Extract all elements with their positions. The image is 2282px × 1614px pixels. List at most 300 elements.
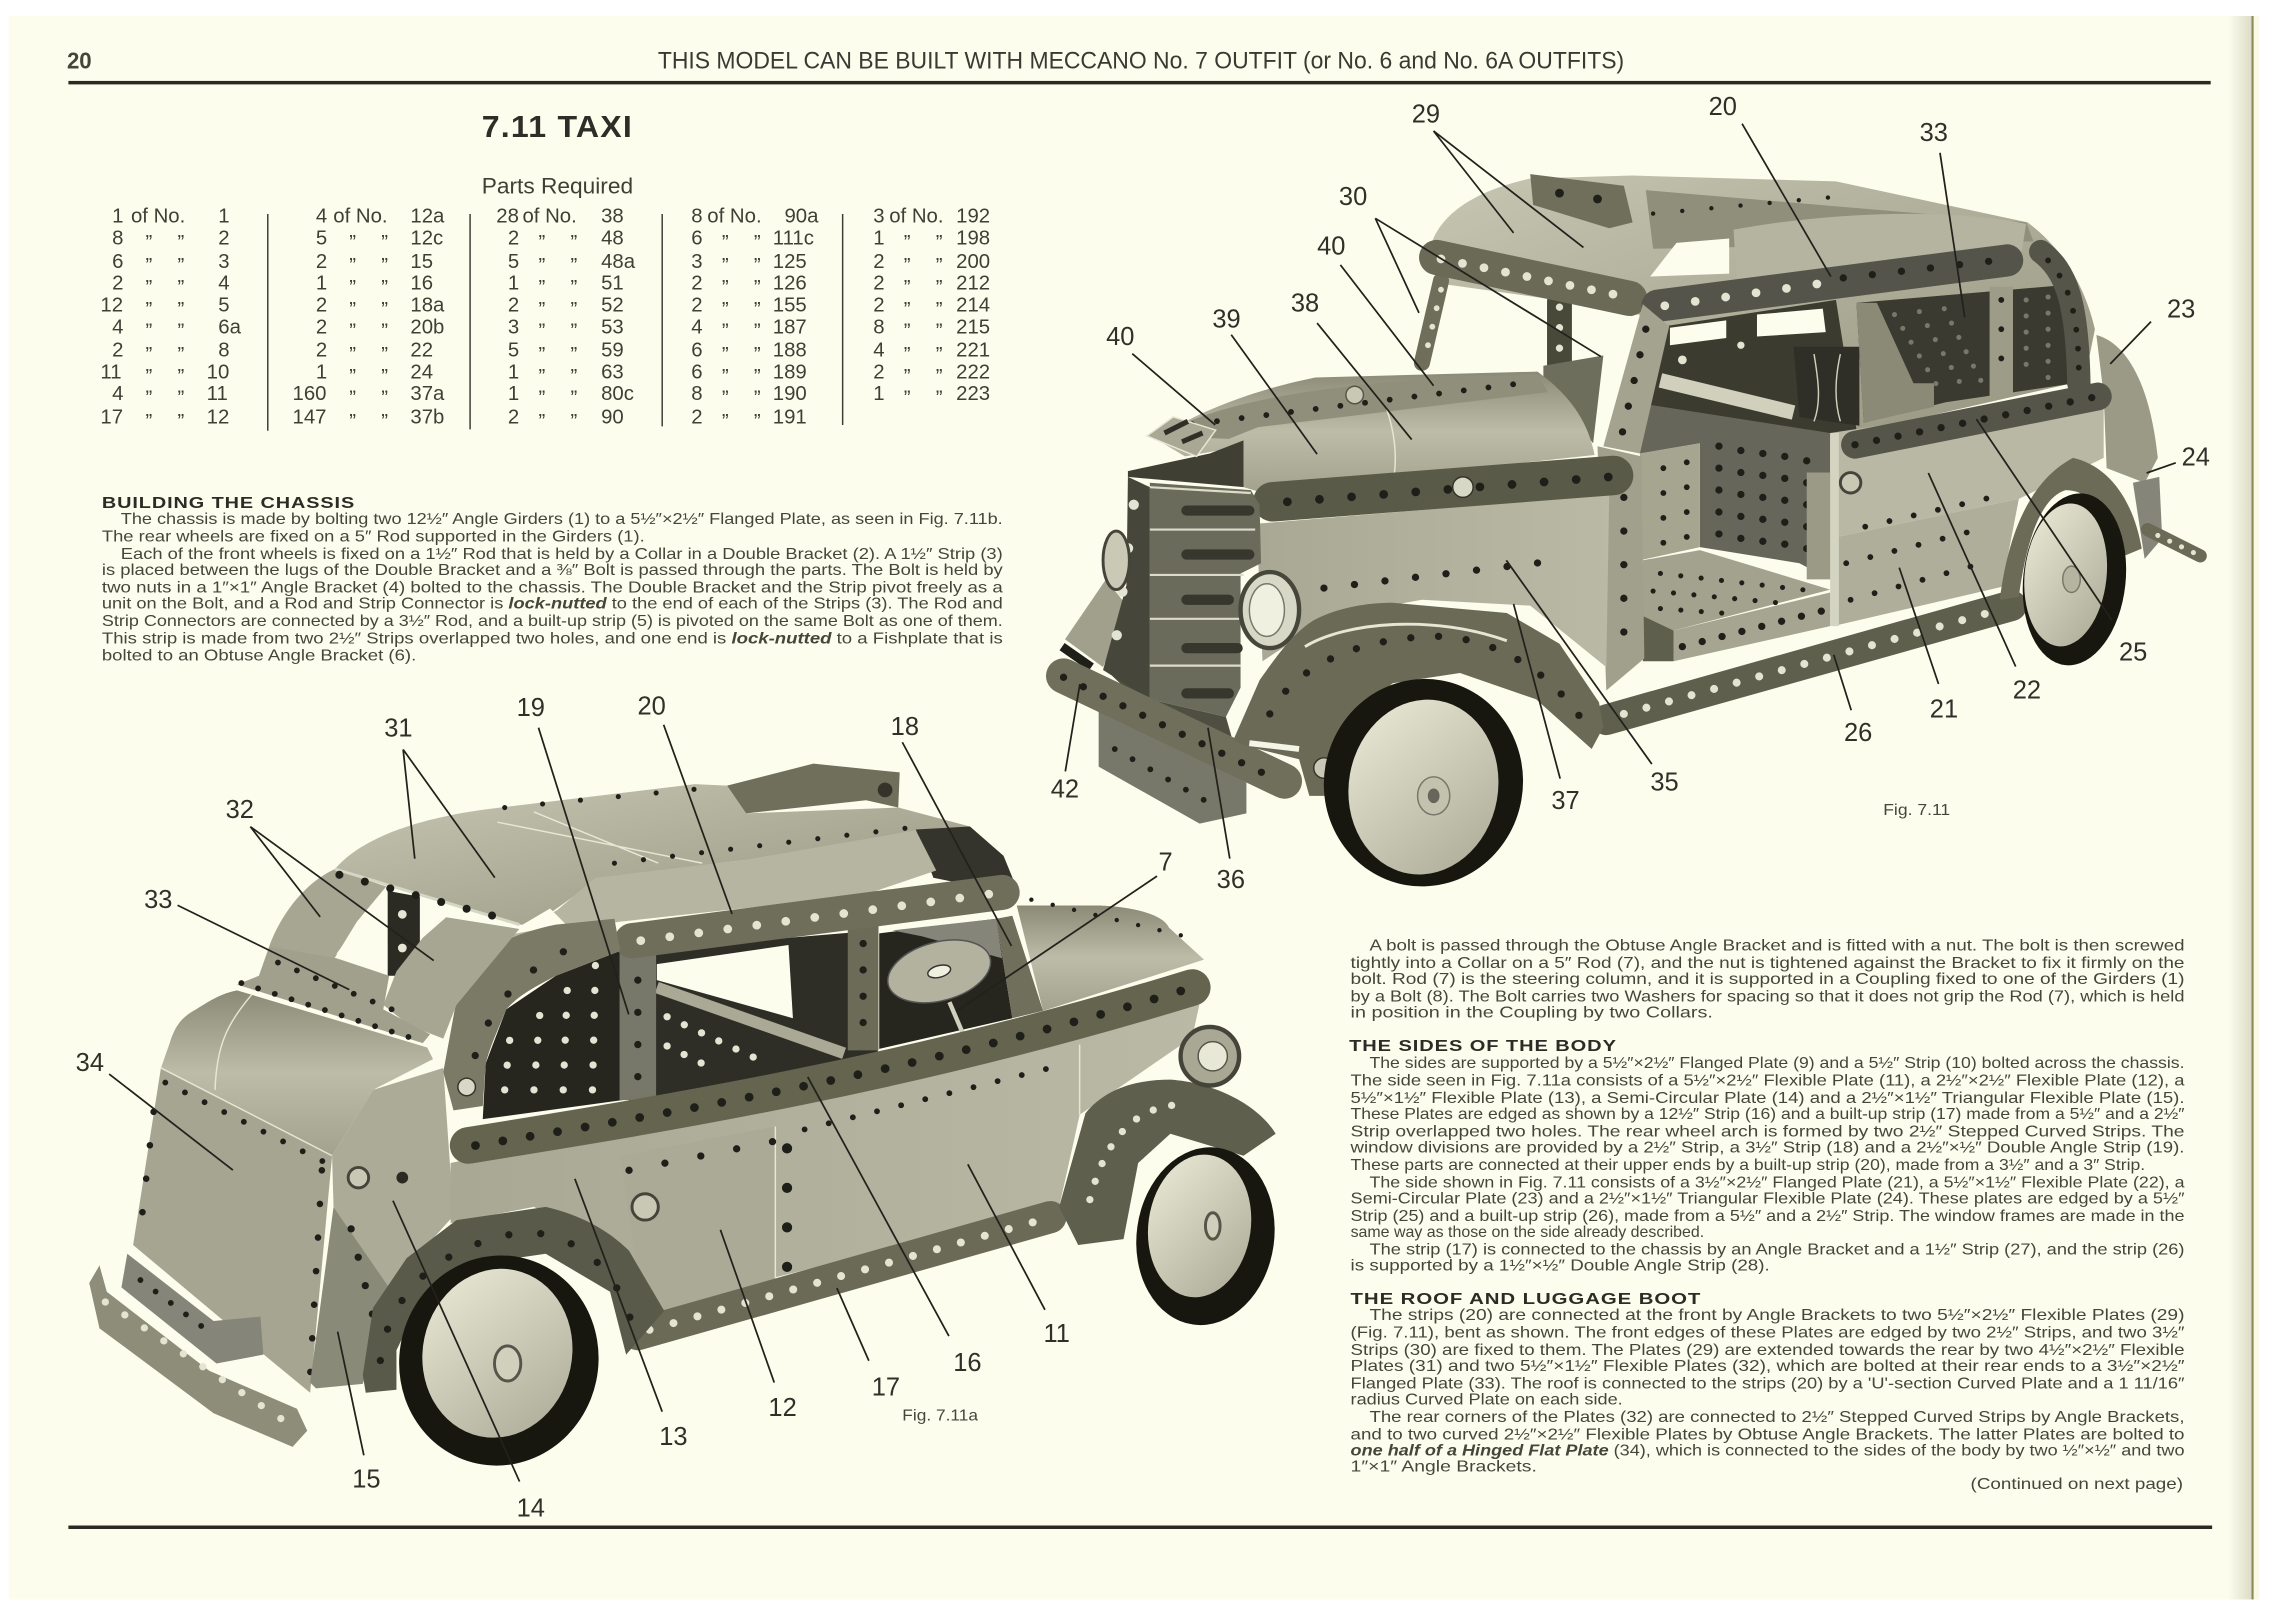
column 5: 215 xyxy=(956,316,990,338)
right headlight xyxy=(1241,572,1299,648)
column 5: ” xyxy=(904,255,911,277)
column 4: 190 xyxy=(773,383,807,405)
callouts for figure 7.11: 22 xyxy=(2013,677,2041,705)
column 5: ” xyxy=(936,255,943,277)
column 5: ” xyxy=(904,277,911,299)
upper window strip xyxy=(632,892,1002,941)
rear semi-circular plate xyxy=(2096,335,2158,483)
body text: The sides are supported by a 5½″×2½″ Flanged Plate (9) and a 5½″ Strip (10) bolted across the chassis. xyxy=(1369,1055,2184,1072)
column 5: 214 xyxy=(956,294,990,316)
column 3: 59 xyxy=(601,340,624,362)
callouts for figure 7.11a: 12 xyxy=(768,1394,797,1422)
front fender xyxy=(1059,1027,1276,1245)
column 4: ” xyxy=(722,299,729,321)
callouts for figure 7.11a: 17 xyxy=(872,1374,900,1402)
callouts for figure 7.11: 30 xyxy=(1339,183,1367,211)
section: the roof and luggage boot xyxy=(1351,1291,2185,1493)
column 5: ” xyxy=(904,321,911,343)
sill strip xyxy=(638,1217,1050,1334)
column 1: 12 xyxy=(100,294,123,316)
column 4: 6 xyxy=(691,228,703,250)
column 3: ” xyxy=(538,344,545,366)
right window xyxy=(879,919,1012,1049)
column 2: ” xyxy=(381,366,388,388)
callouts for figure 7.11: 23 xyxy=(2167,295,2195,323)
column 1: 11 xyxy=(100,361,122,383)
centre interior xyxy=(629,930,878,1105)
column 4: ” xyxy=(722,277,729,299)
column 5: 200 xyxy=(956,251,990,273)
column 3: ” xyxy=(570,344,577,366)
column 2: ” xyxy=(381,232,388,254)
column 2: 1 xyxy=(316,273,327,295)
body text: (Fig. 7.11), bent as shown. The front edges of these Plates are edged by two 2½″ Strips, and two 3½″ xyxy=(1351,1324,2185,1341)
column 1: ” xyxy=(146,366,153,388)
column 5: ” xyxy=(936,299,943,321)
column 3: ” xyxy=(570,321,577,343)
column 2: 4 xyxy=(316,206,327,228)
column 1: 4 xyxy=(112,383,123,405)
callouts for figure 7.11: 40 xyxy=(1317,233,1345,261)
column 3: ” xyxy=(538,299,545,321)
column 4: ” xyxy=(754,321,761,343)
column 2: 20b xyxy=(410,316,444,338)
column 5: 2 xyxy=(873,361,885,383)
callouts for figure 7.11a: 34 xyxy=(76,1049,104,1077)
roof side curved plate xyxy=(443,830,936,1072)
parts table xyxy=(100,206,990,433)
belt strip xyxy=(468,987,1192,1145)
column 2: ” xyxy=(349,299,356,321)
column 4: 90a xyxy=(784,206,819,228)
column 5: 8 xyxy=(873,316,885,338)
column 3 xyxy=(496,206,636,433)
column 3: ” xyxy=(538,321,545,343)
column 1: ” xyxy=(146,299,153,321)
rear window with perforated plate xyxy=(1856,285,2074,423)
column 1: 11 xyxy=(207,383,228,405)
column 2: 22 xyxy=(410,340,433,362)
side quarter plate xyxy=(310,1068,454,1388)
column 1: ” xyxy=(178,321,185,343)
column 4: ” xyxy=(722,344,729,366)
front side panel holes xyxy=(1324,562,1548,588)
belt strip rear xyxy=(1855,396,2098,445)
column 2: ” xyxy=(349,411,356,433)
column 5: ” xyxy=(936,366,943,388)
callouts for figure 7.11a: 33 xyxy=(144,886,172,914)
right pillar xyxy=(996,916,1043,1018)
column 1: ” xyxy=(178,299,185,321)
column 1: ” xyxy=(178,344,185,366)
column 4: ” xyxy=(722,232,729,254)
column 4: 2 xyxy=(691,407,703,429)
section: steering text: tightly into a Collar on a 5″ Rod (7), and the nut is tightened against the Bracket to fix it firmly on the xyxy=(1351,955,2185,972)
callouts for figure 7.11: Fig. 7.11 xyxy=(1883,802,1950,819)
front wheel xyxy=(1307,663,1539,902)
title: 7.11 TAXI xyxy=(482,110,633,144)
column 2: 147 xyxy=(293,407,327,429)
column 4: ” xyxy=(754,388,761,410)
body text: The strip (17) is connected to the chassis by an Angle Bracket and a 1½″ Strip (27), and the strip (26) xyxy=(1369,1242,2184,1259)
column 3: 1 xyxy=(508,361,519,383)
column 2: 24 xyxy=(410,361,433,383)
rear flanged plate strip xyxy=(237,947,430,1043)
pillar left inner xyxy=(1543,355,1603,443)
callouts for figure 7.11a: Fig. 7.11a xyxy=(902,1407,978,1424)
callouts for figure 7.11: 24 xyxy=(2182,444,2210,472)
windscreen posts xyxy=(1422,281,1559,369)
column 2: 37a xyxy=(410,383,445,405)
column 5: ” xyxy=(904,232,911,254)
body text: Each of the front wheels is fixed on a 1½″ Rod that is held by a Collar in a Double Bracket (2). A 1½″ Strip (3) xyxy=(121,546,1003,563)
rear wheel xyxy=(2014,488,2134,671)
column 3: ” xyxy=(570,277,577,299)
window arch frame xyxy=(443,919,620,1110)
column 4: ” xyxy=(754,232,761,254)
roof top plate xyxy=(335,784,1004,925)
column 5: 212 xyxy=(956,273,990,295)
column 4: ” xyxy=(754,344,761,366)
column 3: 51 xyxy=(601,273,624,295)
body text: is placed between the lugs of the Double Bracket and a ⅜″ Bolt is passed through the parts. The Bolt is held by xyxy=(102,562,1003,579)
column 3: 48 xyxy=(601,228,624,250)
column 1: 1 xyxy=(218,206,230,228)
column 1: 5 xyxy=(218,294,230,316)
hood xyxy=(1017,900,1204,1011)
column 5: ” xyxy=(904,299,911,321)
heading: THE ROOF AND LUGGAGE BOOT xyxy=(1351,1291,1701,1308)
section: the sides of the body xyxy=(1349,1038,2185,1275)
column 2: ” xyxy=(381,277,388,299)
column 3: ” xyxy=(570,232,577,254)
column 5 xyxy=(873,206,990,410)
column 3: 1 xyxy=(508,383,519,405)
column 3: ” xyxy=(570,411,577,433)
column 3: 52 xyxy=(601,294,624,316)
a-pillar xyxy=(1603,304,1669,644)
column 4: ” xyxy=(754,366,761,388)
column 4: ” xyxy=(722,411,729,433)
column 4: ” xyxy=(754,255,761,277)
roof rear edge strip xyxy=(335,869,519,925)
column 2: ” xyxy=(381,299,388,321)
column 3: ” xyxy=(570,366,577,388)
callouts for figure 7.11a: 13 xyxy=(659,1423,688,1451)
body side plates xyxy=(451,1004,1200,1317)
under-grille dark xyxy=(1103,667,1241,768)
body text: Semi-Circular Plate (23) and a 2½″×1½″ Triangular Flexible Plate (24). These plates are edged by a 5½″ xyxy=(1351,1191,2185,1208)
hood xyxy=(1156,372,1595,492)
callouts for figure 7.11: 33 xyxy=(1920,119,1948,147)
body text: The strips (20) are connected at the front by Angle Brackets to two 5½″×2½″ Flexible Plates (29) xyxy=(1369,1307,2184,1324)
column 2: 16 xyxy=(410,273,433,295)
column 5: 1 xyxy=(873,228,885,250)
column 4: 2 xyxy=(691,273,703,295)
column 4: 8 xyxy=(691,383,703,405)
column 1: ” xyxy=(146,388,153,410)
column 1: ” xyxy=(146,321,153,343)
belt strip front xyxy=(1273,475,1614,502)
body text: radius Curved Plate on each side. xyxy=(1351,1391,1623,1408)
column 1: 4 xyxy=(112,316,123,338)
column 1: of No. xyxy=(131,206,185,228)
column 1: 8 xyxy=(218,340,230,362)
column 1: ” xyxy=(146,344,153,366)
body text: These parts are connected at their upper ends by a built-up strip (20), made from a 3½″ and a 3″ Strip. xyxy=(1351,1157,2145,1174)
column 1: ” xyxy=(146,255,153,277)
column 1: 6a xyxy=(218,316,242,338)
column 4: ” xyxy=(722,366,729,388)
column 5: ” xyxy=(936,344,943,366)
column 4: 126 xyxy=(773,273,807,295)
column 2: 15 xyxy=(410,251,433,273)
column 2: 12a xyxy=(410,206,445,228)
column 4: 188 xyxy=(773,340,807,362)
callouts for figure 7.11: 29 xyxy=(1412,100,1440,128)
column 5: 222 xyxy=(956,361,990,383)
callouts for figure 7.11a: 11 xyxy=(1043,1320,1070,1348)
callouts for figure 7.11a: 16 xyxy=(953,1349,982,1377)
column 5: 3 xyxy=(873,206,885,228)
callouts for figure 7.11: 39 xyxy=(1212,305,1241,333)
page number: 20 xyxy=(67,47,92,73)
hood dark gap and clip xyxy=(1128,417,1243,487)
column 3: 90 xyxy=(601,407,624,429)
column 4: 2 xyxy=(691,294,703,316)
rear wheel arch xyxy=(363,1207,664,1393)
body text: The side shown in Fig. 7.11 consists of a 3½″×2½″ Flanged Plate (21), a 5½″×1½″ Flexible Plate (22), a xyxy=(1369,1175,2185,1192)
column 1: ” xyxy=(178,255,185,277)
column 4: 6 xyxy=(691,361,703,383)
heading: THE SIDES OF THE BODY xyxy=(1349,1038,1617,1055)
column 2: ” xyxy=(381,388,388,410)
column 3: ” xyxy=(570,255,577,277)
column 2: ” xyxy=(349,277,356,299)
column 4: ” xyxy=(722,255,729,277)
column 1: ” xyxy=(178,366,185,388)
column 2: ” xyxy=(349,232,356,254)
callouts for figure 7.11a: 15 xyxy=(352,1465,381,1493)
rear post and bumper xyxy=(2133,477,2200,559)
column 4: 4 xyxy=(691,316,703,338)
column 3: 38 xyxy=(601,206,624,228)
column 4: ” xyxy=(754,411,761,433)
column 1: 10 xyxy=(207,361,229,383)
body text: window divisions are provided by a 2½″ Strip, a 3½″ Strip (18) and a 2½″×½″ Double Angle Strip (19). xyxy=(1349,1140,2184,1157)
body text: Strips (30) are fixed to them. The Plates (29) are extended towards the rear by two 4½″×2½″ Flexible xyxy=(1351,1342,2185,1359)
subtitle: parts required: Parts Required xyxy=(482,174,633,199)
callouts for figure 7.11: 25 xyxy=(2119,639,2147,667)
column 3: 2 xyxy=(508,407,519,429)
column 3: 2 xyxy=(508,228,519,250)
column 5: 2 xyxy=(873,273,885,295)
left headlight xyxy=(1103,531,1129,590)
column 5: ” xyxy=(936,277,943,299)
column 3: 28 xyxy=(496,206,519,228)
column 1 xyxy=(100,206,242,433)
callouts for figure 7.11: 36 xyxy=(1217,866,1245,894)
column 2: of No. xyxy=(333,206,388,228)
column 5: 2 xyxy=(873,294,885,316)
column 5: 4 xyxy=(873,340,885,362)
column 5: ” xyxy=(936,321,943,343)
rear quarter pillar xyxy=(2041,252,2079,383)
column 4: 187 xyxy=(773,316,807,338)
column 2: 2 xyxy=(316,294,327,316)
body text: same way as those on the side already described. xyxy=(1351,1224,1704,1241)
column 3: 80c xyxy=(601,383,634,405)
column 2: ” xyxy=(381,255,388,277)
column 2: 2 xyxy=(316,316,327,338)
column 5: 223 xyxy=(956,383,990,405)
column 5: ” xyxy=(904,344,911,366)
column 4: ” xyxy=(722,321,729,343)
column 2: 12c xyxy=(410,228,443,250)
column 1: 8 xyxy=(112,228,123,250)
left fender xyxy=(1062,579,1128,667)
column 3: 3 xyxy=(508,316,519,338)
body text: 5½″×1½″ Flexible Plate (13), a Semi-Circular Plate (14) and a 2½″×1½″ Triangular Flexible Plate (15). xyxy=(1351,1090,2184,1107)
column 2 xyxy=(293,206,445,433)
column 4: 111c xyxy=(773,228,814,250)
section: steering text xyxy=(1351,937,2185,1021)
column 1: 2 xyxy=(112,273,123,295)
column 1: ” xyxy=(146,277,153,299)
body text xyxy=(102,511,1003,665)
front side panel xyxy=(1257,494,1609,667)
column 5: 2 xyxy=(873,251,885,273)
callouts for figure 7.11a: 32 xyxy=(226,796,254,824)
callouts for figure 7.11: 20 xyxy=(1709,93,1737,121)
column 5: ” xyxy=(904,388,911,410)
callouts for figure 7.11: 42 xyxy=(1051,776,1079,804)
column 1: 3 xyxy=(218,251,230,273)
body text: The rear wheels are fixed on a 5″ Rod supported in the Girders (1). xyxy=(102,528,645,545)
column 4 xyxy=(691,206,819,433)
column 3: 53 xyxy=(601,316,624,338)
rear bumper mount xyxy=(121,1254,263,1363)
body text: The rear corners of the Plates (32) are connected to 2½″ Stepped Curved Strips by Angle Brackets, xyxy=(1369,1409,2184,1426)
column 1: 2 xyxy=(218,228,230,250)
interior and side windows xyxy=(1640,300,1859,579)
column 4: 155 xyxy=(773,294,807,316)
column 1: ” xyxy=(178,277,185,299)
column 1: ” xyxy=(146,232,153,254)
rear fender arch xyxy=(2000,458,2142,600)
column 3: 2 xyxy=(508,294,519,316)
column 5: 1 xyxy=(873,383,885,405)
column 1: ” xyxy=(178,411,185,433)
body text: unit on the Bolt, and a Rod and Strip Connector is lock-nutted to the end of each of the Strips (3). The Rod and xyxy=(102,595,1003,612)
body text: Flanged Plate (33). The roof is connected to the strips (20) by a 'U'-section Curved Plate and a 1 11/16″ xyxy=(1351,1375,2185,1392)
callouts for figure 7.11a: 20 xyxy=(637,693,666,721)
column 5: ” xyxy=(936,388,943,410)
body text: Strip (25) and a built-up strip (26), made from a 5½″ and a 2½″ Strip. The window frames are made in the xyxy=(1351,1208,2185,1225)
column 3: ” xyxy=(570,299,577,321)
column 1: ” xyxy=(146,411,153,433)
sill strip xyxy=(1606,606,2012,720)
heading: BUILDING THE CHASSIS xyxy=(102,495,355,512)
rear bumper xyxy=(89,1265,307,1447)
section: steering text: bolt. Rod (7) is the steering column, and it is supported in a Coupling fixed to one of the Girders (1) xyxy=(1351,971,2184,988)
left post xyxy=(625,951,650,1100)
column 5: ” xyxy=(904,366,911,388)
column 4: 125 xyxy=(773,251,807,273)
column 4: ” xyxy=(754,277,761,299)
callouts for figure 7.11: 21 xyxy=(1930,695,1958,723)
callouts for figure 7.11: 40 xyxy=(1106,323,1134,351)
body text: bolted to an Obtuse Angle Bracket (6). xyxy=(102,648,416,665)
callouts for figure 7.11: 38 xyxy=(1291,289,1319,317)
column 5: 221 xyxy=(956,340,990,362)
body text: two nuts in a 1″×1″ Angle Bracket (4) bolted to the chassis. The Double Bracket and the Strip pivot freely as a xyxy=(102,579,1003,596)
tow plate xyxy=(727,764,900,813)
column 3: ” xyxy=(538,388,545,410)
callouts for figure 7.11a: 14 xyxy=(517,1494,545,1522)
column 4: 189 xyxy=(773,361,807,383)
body text: This strip is made from two 2½″ Strips overlapped two holes, and one end is lock-nutted to a Fishplate that is xyxy=(102,630,1003,647)
column 2: ” xyxy=(349,344,356,366)
rear roof plates xyxy=(269,869,519,1039)
grille xyxy=(1103,477,1261,717)
callouts for figure 7.11: 37 xyxy=(1551,787,1580,815)
column 4: 191 xyxy=(773,407,807,429)
callouts for figure 7.11: 26 xyxy=(1844,719,1872,747)
body text: Plates (31) and two 5½″×1½″ Flexible Plates (32), which are bolted at their rear ends to a 3½″×2½″ xyxy=(1351,1358,2185,1375)
column 3: ” xyxy=(538,255,545,277)
column 5: ” xyxy=(936,232,943,254)
upper side strip xyxy=(1657,260,2007,306)
column 3: 1 xyxy=(508,273,519,295)
body text xyxy=(1349,1055,2185,1275)
section: steering text: A bolt is passed through the Obtuse Angle Bracket and is fitted with a nut. The bolt is then screwed xyxy=(1369,937,2184,954)
body text xyxy=(1351,1307,2185,1475)
column 4: ” xyxy=(754,299,761,321)
running header: THIS MODEL CAN BE BUILT WITH MECCANO No. 7 OUTFIT (or No. 6 and No. 6A OUTFITS) xyxy=(658,47,1624,74)
body text: one half of a Hinged Flat Plate (34), which is connected to the sides of the body by two ½″×½″ and two xyxy=(1351,1442,2185,1459)
body text: and to two curved 2½″×2½″ Flexible Plates by Obtuse Angle Brackets. The latter Plates are bolted to xyxy=(1351,1426,2185,1443)
column 2: ” xyxy=(381,344,388,366)
centre post xyxy=(853,925,874,1050)
column 3: 48a xyxy=(601,251,636,273)
callouts for figure 7.11 xyxy=(1051,93,2210,894)
section: building the chassis xyxy=(102,495,1003,665)
column 4: 8 xyxy=(691,206,703,228)
column 2: 37b xyxy=(410,407,444,429)
column 3: ” xyxy=(570,388,577,410)
section: steering text: in position in the Coupling by two Collars. xyxy=(1351,1004,1713,1021)
rear wheel xyxy=(380,1237,618,1484)
callouts for figure 7.11a: 7 xyxy=(1158,848,1173,876)
column 2: ” xyxy=(381,321,388,343)
column 1: ” xyxy=(178,232,185,254)
column 3: ” xyxy=(538,411,545,433)
column 2: 18a xyxy=(410,294,445,316)
body text: 1″×1″ Angle Brackets. xyxy=(1351,1458,1537,1475)
figure 7.11: taxi front three-quarter view xyxy=(1062,174,2200,902)
door post xyxy=(1598,446,1644,691)
column 4: 6 xyxy=(691,340,703,362)
column 3: ” xyxy=(538,366,545,388)
body text: Strip overlapped two holes. The rear wheel arch is formed by two 2½″ Stepped Curved Strips. The xyxy=(1351,1124,2185,1141)
column 2: ” xyxy=(349,255,356,277)
column 1: 4 xyxy=(218,273,230,295)
column 3: 5 xyxy=(508,251,519,273)
column 3: 63 xyxy=(601,361,624,383)
continued note: (Continued on next page) xyxy=(1971,1476,2183,1493)
column 2: ” xyxy=(349,366,356,388)
